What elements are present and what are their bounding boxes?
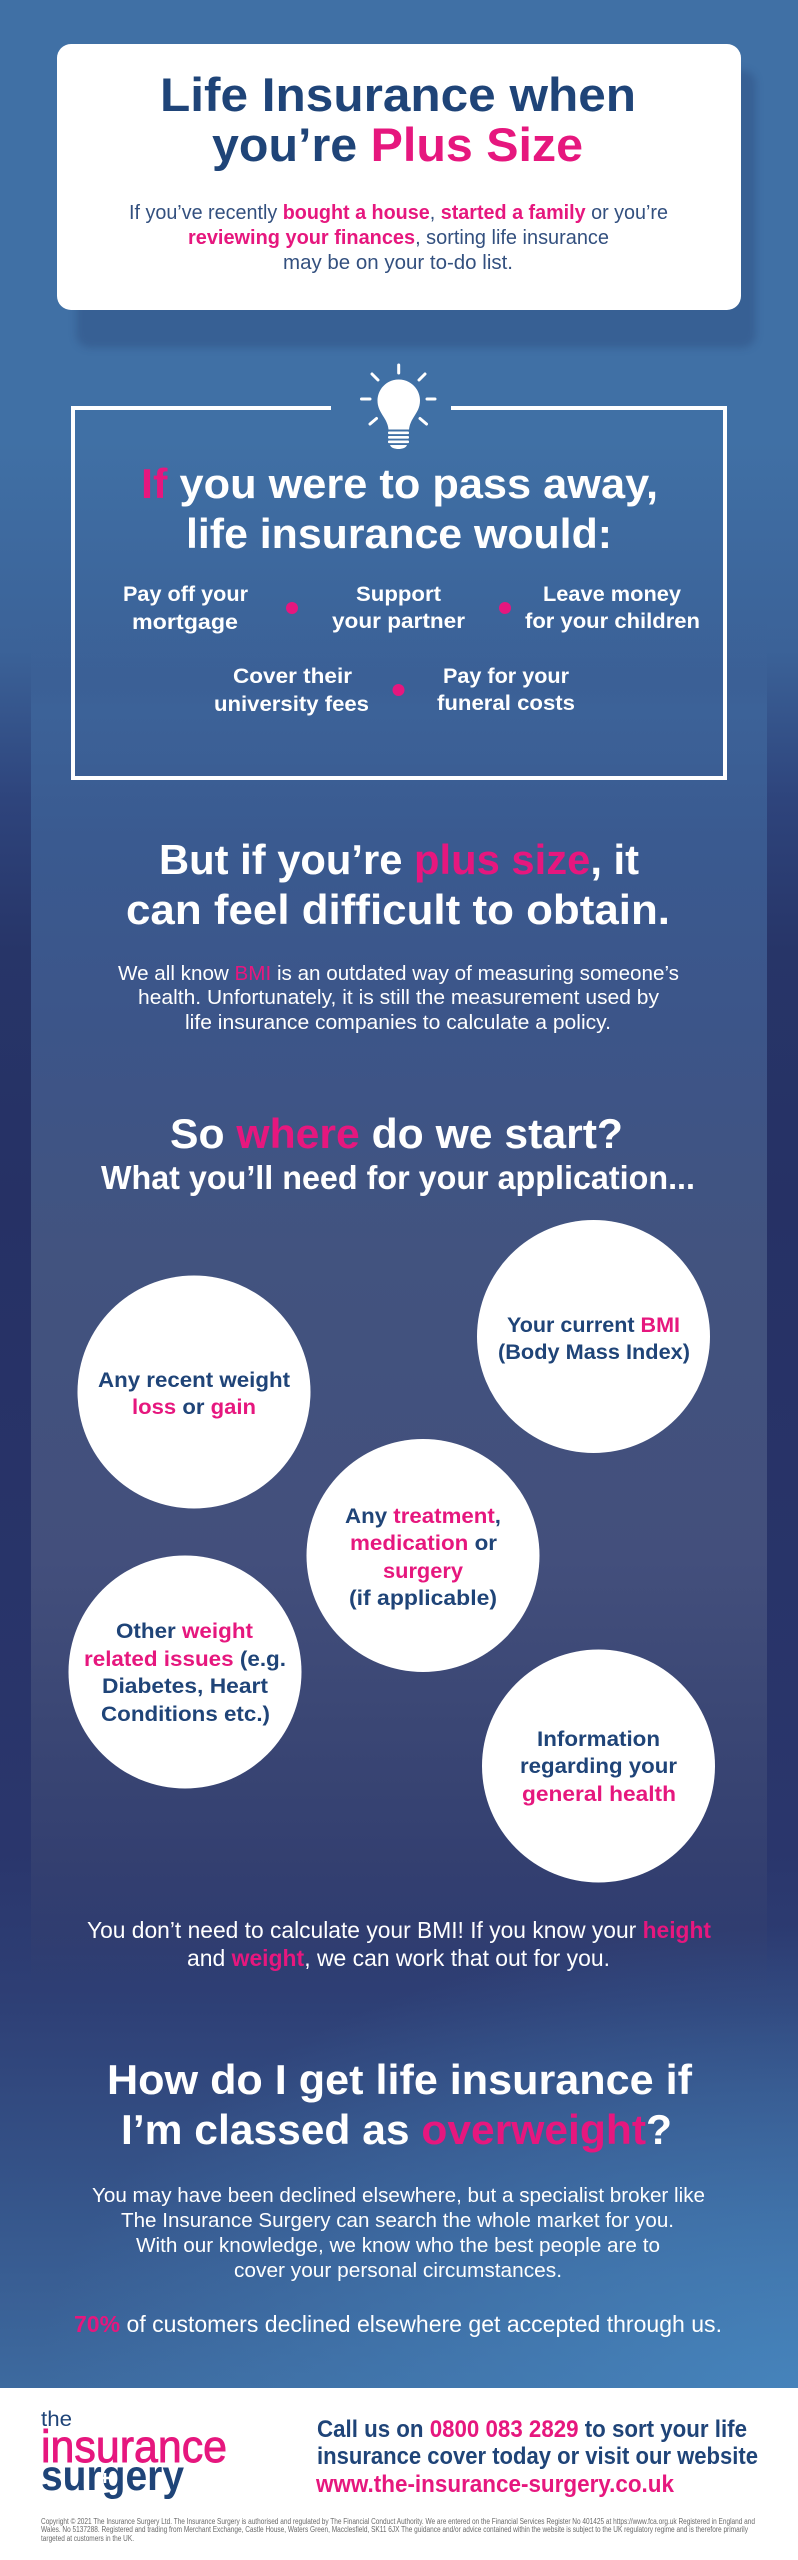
heading: overweight: How do I get life insurance if — [107, 2056, 693, 2103]
circle: general health: general health — [522, 1783, 676, 1806]
heading: plus size — [126, 836, 670, 933]
text: specialist broker — [92, 2185, 705, 2282]
call to action: www.the-insurance-surgery.co.uk — [315, 2471, 675, 2498]
item: funeral costs — [437, 665, 575, 715]
text: BMI paragraph: health. Unfortunately, it is still the measurement used by — [138, 987, 659, 1009]
heading: overweight: I’m classed as overweight? — [121, 2106, 672, 2153]
title — [160, 68, 636, 171]
call to action: Call us on 0800 083 2829 to sort your life — [317, 2416, 747, 2443]
circle: current BMI: Your current BMI — [507, 1314, 680, 1337]
item: pay off mortgage — [123, 583, 248, 634]
card shadow — [76, 70, 756, 348]
icon: light bulb — [362, 365, 435, 449]
heading: plus size: But if you’re plus size, it — [159, 836, 639, 883]
circle: weight related issues: related issues (e.g. — [84, 1648, 286, 1671]
card background — [57, 44, 741, 310]
icon: plus in logo — [100, 2473, 110, 2483]
frame — [73, 408, 725, 778]
bullet dots — [286, 602, 511, 696]
circle: treatment: Any treatment , — [345, 1505, 501, 1528]
heading: where do we start — [101, 1110, 695, 1196]
item: university fees — [214, 665, 369, 716]
item: support partner — [332, 583, 465, 633]
circle: general health — [482, 1650, 715, 1882]
panel: life insurance would — [73, 365, 725, 778]
circle: weight related issues: Conditions etc.) — [101, 1703, 270, 1726]
circle: weight related issues — [68, 1556, 302, 1788]
circle: general health: Information — [537, 1728, 660, 1751]
text: BMI paragraph — [118, 963, 679, 1034]
text: BMI paragraph: We all know BMI is an outdated way of measuring someone’s — [118, 963, 679, 985]
circle: current BMI: (Body Mass Index) — [498, 1341, 690, 1364]
circle: treatment — [306, 1439, 540, 1672]
text: 70 percent statistic: 70% of customers declined elsewhere get accepted through us. — [74, 2311, 722, 2337]
circle: weight related issues: Other weight — [116, 1620, 253, 1643]
copyright: targeted at customers in the UK. — [41, 2534, 134, 2543]
circle: weight related issues: Diabetes, Heart — [102, 1675, 268, 1698]
intro text — [129, 202, 668, 274]
text: specialist broker: You may have been declined elsewhere, but a specialist broker like — [92, 2185, 705, 2207]
call to action — [315, 2416, 758, 2498]
heading — [141, 460, 658, 557]
heading: life insurance would: — [186, 510, 612, 557]
text: BMI note: You don’t need to calculate your BMI! If you know your height — [87, 1917, 711, 1943]
circle: weight loss or gain — [78, 1276, 310, 1508]
item: leave money — [525, 583, 700, 633]
heading: where do we start: What you’ll need for your application... — [101, 1159, 695, 1196]
text: specialist broker: The Insurance Surgery can search the whole market for you. — [121, 2210, 674, 2232]
item: funeral costs: funeral costs — [437, 692, 575, 715]
panel: intro card — [57, 44, 756, 348]
circle: treatment: (if applicable) — [349, 1587, 497, 1610]
circle: weight loss or gain: loss or gain — [132, 1396, 256, 1419]
call to action: insurance cover today or visit our website — [317, 2443, 758, 2470]
footer band — [0, 2388, 798, 2560]
item: support partner: your partner — [332, 610, 465, 633]
circle: current BMI — [477, 1220, 710, 1453]
item: leave money: Leave money — [543, 583, 681, 606]
text: BMI paragraph: life insurance companies to calculate a policy. — [185, 1012, 611, 1034]
heading: plus size: can feel difficult to obtain. — [126, 886, 670, 933]
title: you’re Plus Size — [212, 118, 583, 171]
intro text: reviewing your finances, sorting life insurance — [188, 227, 609, 249]
text: specialist broker: With our knowledge, we know who the best people are to — [136, 2235, 660, 2257]
title: Life Insurance when — [160, 68, 636, 121]
item: university fees: university fees — [214, 693, 369, 716]
logo — [41, 2408, 227, 2500]
text: BMI note — [87, 1917, 711, 1971]
copyright — [41, 2517, 755, 2543]
circle: general health: regarding your — [520, 1755, 677, 1778]
heading: where do we start: So where do we start? — [170, 1110, 623, 1157]
intro text: If you’ve recently bought a house, started a family or you’re — [129, 202, 668, 224]
text: specialist broker: cover your personal circumstances. — [234, 2260, 562, 2282]
heading: If you were to pass away, — [141, 460, 658, 507]
circle: treatment: surgery — [383, 1560, 463, 1583]
item: pay off mortgage: mortgage — [132, 611, 238, 634]
logo: surgery — [41, 2452, 184, 2500]
item: leave money: for your children — [525, 610, 700, 633]
intro text: may be on your to-do list. — [283, 252, 513, 274]
logo: insurance — [41, 2421, 227, 2472]
circle: treatment: medication or — [350, 1532, 497, 1555]
item: funeral costs: Pay for your — [443, 665, 569, 688]
circle: weight loss or gain: Any recent weight — [98, 1369, 290, 1392]
logo: the — [41, 2408, 72, 2431]
item: support partner: Support — [356, 583, 441, 606]
heading: overweight — [107, 2056, 693, 2153]
item: university fees: Cover their — [233, 665, 352, 688]
text: BMI note: and weight, we can work that out for you. — [187, 1945, 610, 1971]
item: pay off mortgage: Pay off your — [123, 583, 248, 606]
